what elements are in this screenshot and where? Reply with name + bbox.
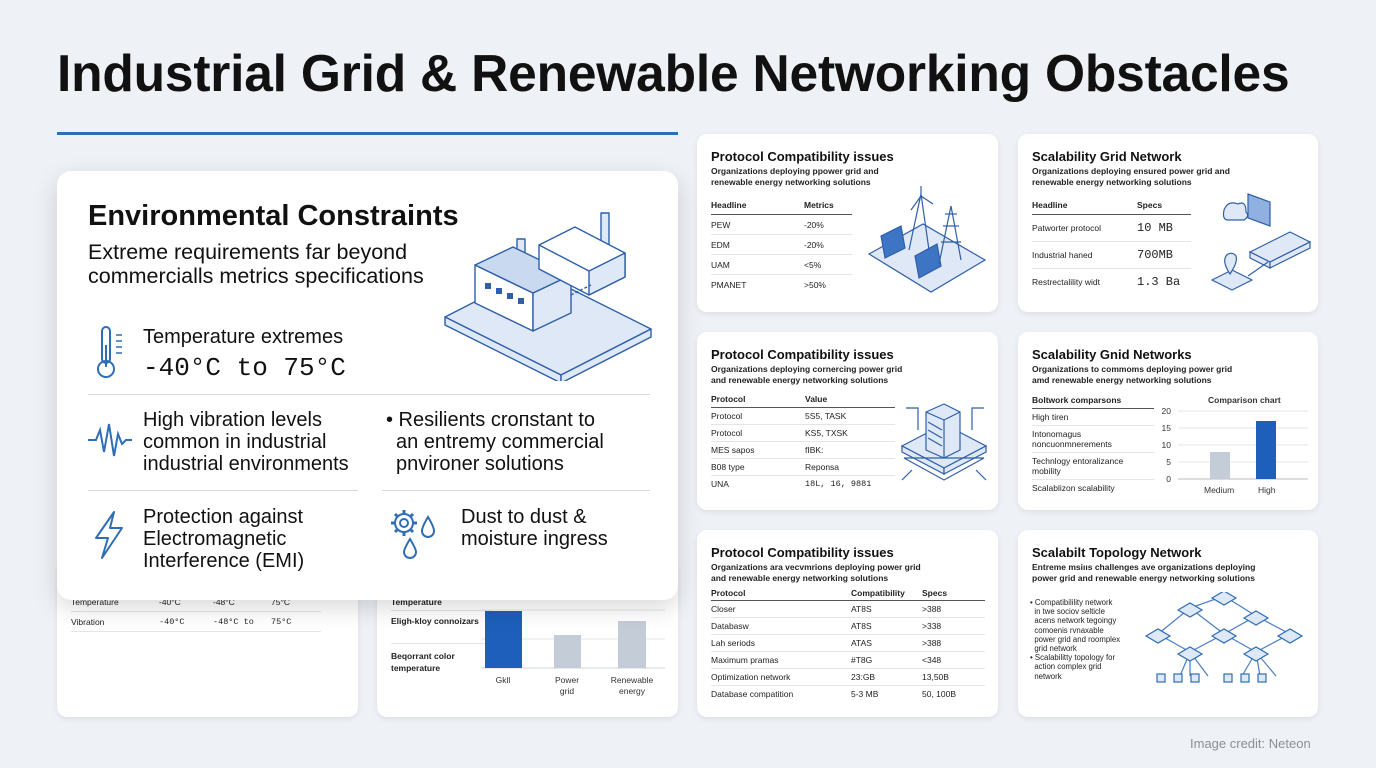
card: temperature table (bottom left): -40°C <box>159 617 185 627</box>
card: protocol compatibility 2 <box>697 332 998 510</box>
card: protocol compatibility 3: >338 <box>922 621 941 631</box>
subtitle: commercialls metrics specifications <box>88 264 424 288</box>
chart: grid <box>560 686 574 696</box>
card: protocol compatibility 1: renewable energy networking solutions <box>711 177 871 187</box>
item: resilience: • Resilients crопstant to <box>386 409 595 431</box>
icon: lightning <box>95 511 123 559</box>
icon: solar and towers <box>868 186 986 293</box>
card: protocol compatibility 3: AT8S <box>851 621 872 631</box>
card: scalability grid network: 1.3 Ba <box>1137 275 1180 289</box>
item: temperature: Temperature extremes <box>143 326 343 348</box>
card: protocol compatibility 3: Closer <box>711 604 736 614</box>
chart: Renewable <box>611 675 654 685</box>
chart: comparison <box>1162 395 1308 495</box>
card: protocol compatibility 1: Metrics <box>804 200 834 210</box>
item: temperature <box>97 326 346 383</box>
card: scalability topology network: grid network <box>1034 644 1077 653</box>
card: scalability topology network: power grid and renewable energy networking solutions <box>1032 573 1255 583</box>
card: scalability topology network: acens network tegoingy <box>1034 616 1116 625</box>
card: scalability grid networks chart: noncuonmnerements <box>1032 439 1112 449</box>
card: protocol compatibility 2: B08 type <box>711 462 745 472</box>
item: EMI: Protection against Electromagnetic Interference (EMI) <box>143 506 304 572</box>
card: scalability topology network <box>1018 530 1318 717</box>
card: scalability grid network: 700MB <box>1137 248 1173 262</box>
card: protocol compatibility 3: Databasw <box>711 621 749 631</box>
card: scalability grid networks chart: Boltwork comparsons <box>1032 395 1121 405</box>
card: protocol compatibility 3: ATAS <box>851 638 872 648</box>
card: scalability grid networks chart: Scalability Gnid Networks <box>1032 347 1192 362</box>
card: scalability grid networks chart: Scalablizon scalability <box>1032 483 1115 493</box>
chart: comparison: 20 <box>1162 406 1171 416</box>
card: protocol compatibility 1: >50% <box>804 280 826 290</box>
card: protocol compatibility 2: Value <box>805 394 827 404</box>
card: bar chart (bottom middle): Beqorrant color temperature <box>391 651 455 673</box>
card: protocol compatibility 1: PMANET <box>711 280 746 290</box>
card: protocol compatibility 1: Organizations deploying ppower grid and <box>711 166 879 176</box>
card: bar chart (bottom middle): Eligh-kloy connoizars <box>391 616 479 626</box>
item: resilience <box>386 409 604 475</box>
chart: comparison: Medium <box>1204 485 1234 495</box>
icon: vibration wave <box>88 424 132 456</box>
card: protocol compatibility 3: >388 <box>922 638 941 648</box>
card: protocol compatibility 1: PEW <box>711 220 730 230</box>
card: protocol compatibility 2: and renewable energy networking solutions <box>711 375 888 385</box>
card: scalability grid network: Restrectalility widt <box>1032 277 1100 287</box>
card: scalability grid network: Patworter protocol <box>1032 223 1101 233</box>
card: protocol compatibility 2: Protocol <box>711 411 742 421</box>
image credit: Image credit: Neteon <box>1190 736 1311 751</box>
card: protocol compatibility 3: Compatibility <box>851 588 905 598</box>
card: protocol compatibility 3: Optimization network <box>711 672 790 682</box>
card: scalability grid networks chart: amd renewable energy networking solutions <box>1032 375 1211 385</box>
card: scalability grid networks chart <box>1018 332 1318 510</box>
card: scalability topology network: • Scalabilitty topology for <box>1030 653 1115 662</box>
card: scalability grid network: Industrial haned <box>1032 250 1092 260</box>
card: protocol compatibility 3: >388 <box>922 604 941 614</box>
chart: comparison: 15 <box>1162 423 1171 433</box>
card: scalability grid networks chart: High tiren <box>1032 412 1068 422</box>
chart: comparison: High <box>1258 485 1276 495</box>
card: protocol compatibility 3: 50, 100B <box>922 689 956 699</box>
heading: Environmental Constraints <box>88 200 459 232</box>
chart: comparison: 5 <box>1166 457 1171 467</box>
card: protocol compatibility 3: Specs <box>922 588 947 598</box>
card: scalability topology network: action complex grid <box>1034 662 1102 671</box>
card: scalability grid network <box>1018 134 1318 312</box>
card: scalability topology network: power grid and roomplex <box>1034 635 1120 644</box>
card: bar chart (bottom middle): Temperature <box>391 597 442 607</box>
card: protocol compatibility 3: Organizations ara vecvmrions deploying power grid <box>711 562 921 572</box>
card: protocol compatibility 1: <5% <box>804 260 821 270</box>
card: scalability topology network: in twe sociov selticle <box>1034 607 1105 616</box>
item: temperature: -40°C to 75°C <box>143 353 346 383</box>
main panel: environmental constraints <box>57 171 678 600</box>
card: protocol compatibility 2: Protocol Compatibility issues <box>711 347 894 362</box>
card: protocol compatibility 3: 5-3 MB <box>851 689 878 699</box>
card: scalability topology network: Entreme msiııs challenges ave organizations deploying <box>1032 562 1255 572</box>
card: temperature table (bottom left): -48°C <box>213 597 235 607</box>
item: resilience: pnvironer solutions <box>396 453 564 475</box>
item: vibration: High vibration levels common in industrial industrial environments <box>143 409 349 475</box>
card: protocol compatibility 3: #T8G <box>851 655 872 665</box>
card: protocol compatibility 1: EDM <box>711 240 730 250</box>
card: protocol compatibility 2: 18L, 16, 9881 <box>805 479 871 489</box>
card: protocol compatibility 3: Lah seriods <box>711 638 755 648</box>
chart <box>481 610 665 696</box>
card: scalability grid networks chart: Technlogy entoralizance <box>1032 456 1123 466</box>
card: scalability topology network: network <box>1034 672 1062 681</box>
card: scalability grid network: Specs <box>1137 200 1162 210</box>
icon: thermometer <box>97 326 122 378</box>
card: protocol compatibility 1 <box>697 134 998 312</box>
card: protocol compatibility 1: -20% <box>804 220 824 230</box>
card: protocol compatibility 2: MES sapos <box>711 445 754 455</box>
card: temperature table (bottom left): Vibration <box>71 617 104 627</box>
chart: comparison: Comparison chart <box>1208 395 1281 405</box>
card: scalability grid network: 10 MB <box>1137 221 1173 235</box>
card: scalability topology network: Scalabilt Topology Network <box>1032 545 1202 560</box>
icon: cloud, solar, location <box>1210 193 1312 291</box>
card: protocol compatibility 3: Protocol <box>711 588 745 598</box>
card: protocol compatibility 1: Protocol Compatibility issues <box>711 149 894 164</box>
card: protocol compatibility 1: Headline <box>711 200 746 210</box>
card: temperature table (bottom left): Temperature <box>71 597 119 607</box>
card: scalability grid network: Headline <box>1032 200 1067 210</box>
card: scalability topology network: comoenis rvnaxable <box>1034 626 1104 635</box>
card: bar chart (bottom middle) <box>377 560 678 717</box>
card: protocol compatibility 3: <348 <box>922 655 941 665</box>
card: temperature table (bottom left): 75°C <box>271 617 291 627</box>
chart: comparison: 10 <box>1162 440 1171 450</box>
card: protocol compatibility 3: Database compatition <box>711 689 793 699</box>
icon: gear and drops <box>391 510 435 559</box>
chart: comparison: 0 <box>1166 474 1171 484</box>
chart: energy <box>619 686 646 696</box>
card: scalability grid network: renewable energy networking solutions <box>1032 177 1192 187</box>
card: scalability grid networks chart: mobility <box>1032 466 1061 476</box>
card: protocol compatibility 2: Reponsa <box>805 462 839 472</box>
card: protocol compatibility 3: 23:GB <box>851 672 875 682</box>
card: temperature table (bottom left) <box>57 560 358 717</box>
card: temperature table (bottom left): -48°C to <box>213 617 254 627</box>
card: protocol compatibility 3: 13,50B <box>922 672 949 682</box>
card: protocol compatibility 2: KS5, TXSK <box>805 428 848 438</box>
card: protocol compatibility 3: Protocol Compatibility issues <box>711 545 894 560</box>
card: protocol compatibility 1: -20% <box>804 240 824 250</box>
icon: factory <box>444 212 652 381</box>
card: temperature table (bottom left): -40°C <box>159 597 181 607</box>
card: protocol compatibility 2: Protocol <box>711 428 742 438</box>
card: temperature table (bottom left): 75°C <box>271 597 290 607</box>
subtitle: Extreme requirements far beyond <box>88 240 407 264</box>
item: resilience: an entremy commercial <box>396 431 604 453</box>
icon: server <box>900 403 988 481</box>
card: protocol compatibility 2: Protocol <box>711 394 745 404</box>
card: scalability topology network: • Compatibilility network <box>1030 598 1112 607</box>
card: protocol compatibility 2: fIBK: <box>805 445 823 455</box>
item: dust <box>391 506 608 559</box>
item: dust: Dust to dust & moisture ingress <box>461 506 608 550</box>
card: protocol compatibility 3 <box>697 530 998 717</box>
card: protocol compatibility 2: 5S5, TASK <box>805 411 846 421</box>
card: protocol compatibility 3: AT8S <box>851 604 872 614</box>
card: scalability grid networks chart: Intonomagus <box>1032 429 1081 439</box>
card: protocol compatibility 2: UNA <box>711 479 729 489</box>
card: scalability grid network: Organizations deploying ensured power grid and <box>1032 166 1230 176</box>
icon: topology diagram <box>1145 592 1303 683</box>
card: protocol compatibility 3: Maximum pramas <box>711 655 779 665</box>
chart: Gkll <box>496 675 510 685</box>
subtitle <box>88 240 424 288</box>
title: Industrial Grid & Renewable Networking Obstacles <box>57 44 1289 102</box>
chart: Power <box>555 675 579 685</box>
card: scalability grid network: Scalability Grid Network <box>1032 149 1182 164</box>
card: protocol compatibility 2: Organizations deploying cornercing power grid <box>711 364 902 374</box>
card: protocol compatibility 3: and renewable energy networking solutions <box>711 573 888 583</box>
card: protocol compatibility 1: UAM <box>711 260 730 270</box>
card: scalability grid networks chart: Organizations to commoms deploying power grid <box>1032 364 1232 374</box>
